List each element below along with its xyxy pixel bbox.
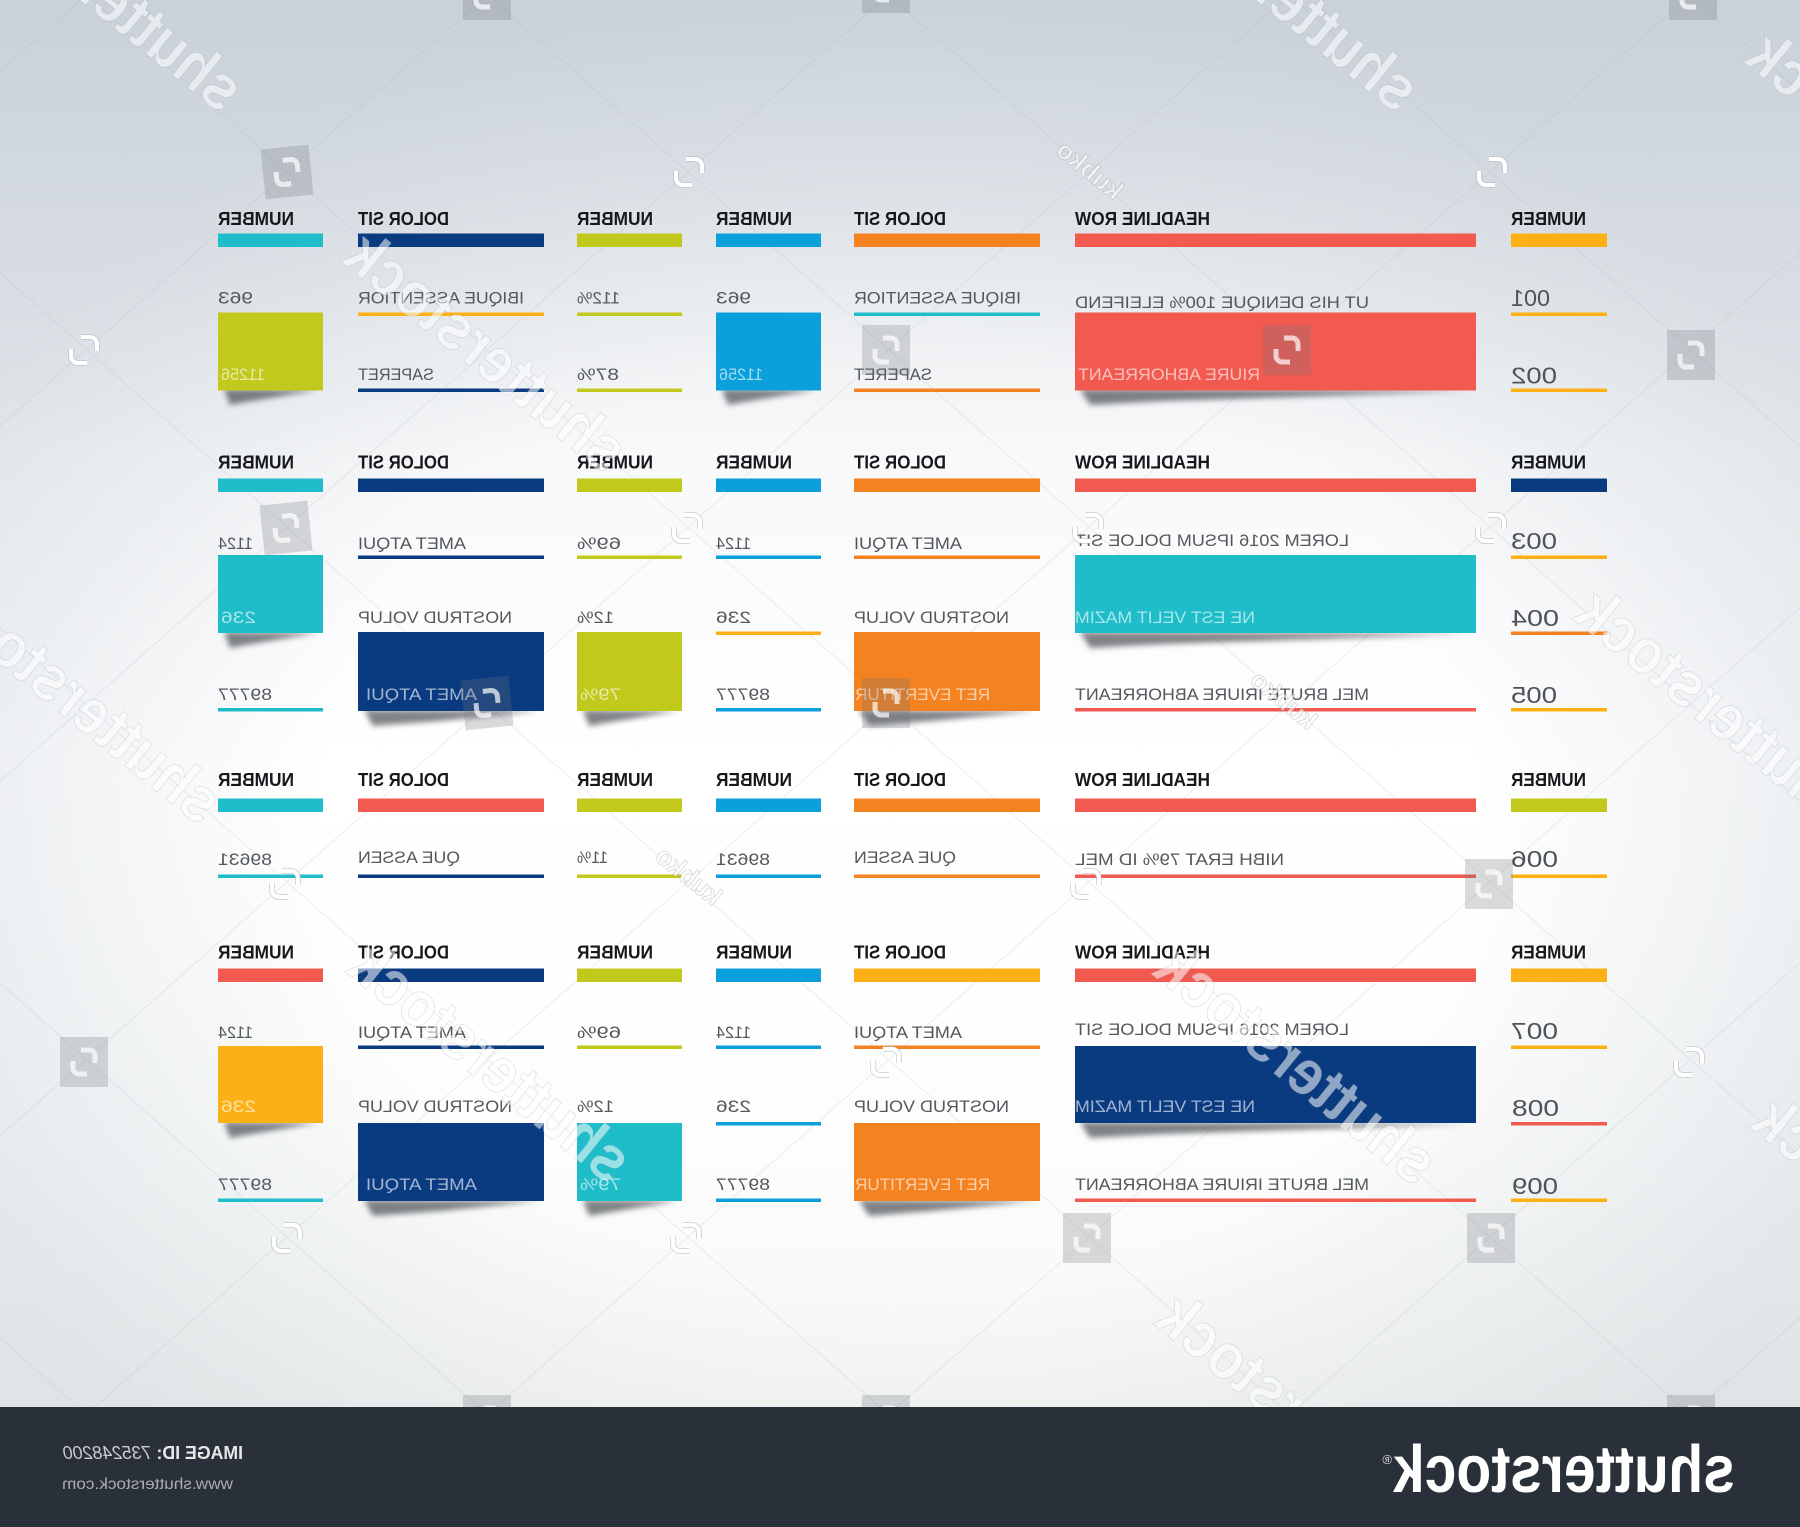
- heading: NUMBER: [1511, 209, 1586, 229]
- underline: [854, 556, 1040, 559]
- table 4: [218, 942, 1607, 1216]
- block label: AMET ATQUI: [366, 1175, 477, 1194]
- header bar: [218, 478, 323, 492]
- value: 89777: [218, 1175, 272, 1194]
- highlighted block: [854, 632, 1040, 711]
- block value: 79%: [580, 1175, 621, 1194]
- heading: NUMBER: [577, 209, 653, 229]
- column 5: [854, 452, 1040, 711]
- highlighted block: [358, 1123, 544, 1201]
- underline: [577, 556, 682, 559]
- underline: [854, 312, 1040, 316]
- heading: HEADLINE ROW: [1075, 452, 1210, 472]
- value: 11%: [577, 848, 608, 867]
- table 2: [218, 452, 1607, 726]
- label: NIBH ERAT 79% ID MEL: [1075, 850, 1284, 869]
- highlighted block: [577, 632, 682, 711]
- column 7: [1511, 209, 1607, 392]
- heading: DOLOR SIT: [854, 452, 946, 472]
- column 2: [358, 942, 544, 1201]
- header bar: [1511, 968, 1607, 982]
- value: 89777: [716, 685, 770, 704]
- label: NOSTRUD VOLUP: [854, 1097, 1009, 1116]
- underline: [1511, 556, 1607, 559]
- heading: NUMBER: [577, 452, 653, 472]
- heading: DOLOR SIT: [358, 770, 449, 790]
- watermark text: kubko: [650, 840, 728, 912]
- value: 1124: [716, 1023, 751, 1042]
- underline: [716, 1122, 821, 1126]
- block value: 11256: [221, 365, 265, 384]
- label: AMET ATQUI: [358, 1023, 466, 1042]
- footer: logo: shutterstock: [1392, 1432, 1735, 1507]
- column 3: [577, 452, 682, 711]
- footer: registered mark: ®: [1382, 1452, 1392, 1467]
- column 3: [577, 209, 682, 392]
- underline: [358, 312, 544, 316]
- highlighted block: [218, 555, 323, 633]
- underline: [1511, 312, 1607, 316]
- row number: 009: [1512, 1173, 1558, 1199]
- underline: [716, 1046, 821, 1049]
- label: SAPERET: [854, 365, 932, 384]
- label: QUE ASSEN: [854, 848, 956, 867]
- heading: NUMBER: [716, 770, 792, 790]
- header bar: [1075, 478, 1476, 492]
- underline: [716, 556, 821, 559]
- value: 12%: [577, 608, 614, 627]
- column 2: [358, 452, 544, 711]
- shadow: table 1 blocks: [224, 389, 1470, 405]
- heading: HEADLINE ROW: [1075, 770, 1210, 790]
- header bar: [716, 968, 821, 982]
- value: 89777: [716, 1175, 770, 1194]
- watermark text: shutterstock: [336, 926, 646, 1197]
- column 4: [716, 770, 821, 878]
- value: 236: [716, 1097, 751, 1116]
- block label: NE EST VELIT MAZIM: [1075, 608, 1255, 627]
- block value: 236: [221, 1097, 256, 1116]
- value: 112%: [577, 289, 620, 308]
- highlighted block: [1075, 312, 1476, 390]
- value: 89777: [218, 685, 272, 704]
- table 1: [218, 209, 1607, 405]
- underline: [577, 874, 682, 878]
- heading: NUMBER: [218, 452, 294, 472]
- block label: AMET ATQUI: [366, 685, 477, 704]
- column 5: [854, 209, 1040, 392]
- footer: image id: IMAGE ID: 735248200: [63, 1443, 243, 1463]
- underline: [1075, 874, 1476, 878]
- block value: 11256: [719, 365, 763, 384]
- label: AMET ATQUI: [854, 1023, 962, 1042]
- heading: HEADLINE ROW: [1075, 209, 1210, 229]
- header bar: [1511, 478, 1607, 492]
- heading: NUMBER: [716, 209, 792, 229]
- column 4: [716, 209, 821, 390]
- underline: [358, 874, 544, 878]
- header bar: [1075, 968, 1476, 982]
- header bar: [854, 234, 1040, 247]
- underline: [1511, 388, 1607, 392]
- column 7: [1511, 452, 1607, 712]
- header bar: [218, 968, 323, 982]
- underline: [1511, 1198, 1607, 1202]
- header bar: [358, 234, 544, 247]
- heading: NUMBER: [716, 942, 792, 962]
- highlighted block: [1075, 555, 1476, 633]
- block label: NE EST VELIT MAZIM: [1075, 1097, 1255, 1116]
- label: QUE ASSEN: [358, 848, 460, 867]
- watermark text: kubko: [1051, 134, 1129, 206]
- column 7: [1511, 942, 1607, 1202]
- column 1: [218, 770, 323, 878]
- row number: 007: [1511, 1018, 1558, 1044]
- label: SAPERET: [358, 365, 434, 384]
- header bar: [716, 234, 821, 247]
- column 1: [218, 942, 323, 1202]
- watermark text: shutterstock: [332, 216, 642, 487]
- header bar: [358, 478, 544, 492]
- heading: NUMBER: [218, 942, 294, 962]
- label: IBIQUE ASSENTIOR: [854, 289, 1021, 308]
- table 3: [218, 770, 1607, 878]
- heading: HEADLINE ROW: [1075, 942, 1210, 962]
- label: NOSTRUD VOLUP: [854, 608, 1009, 627]
- column 5: [854, 770, 1040, 878]
- heading: NUMBER: [577, 770, 653, 790]
- underline: [1511, 708, 1607, 712]
- footer: website: www.shutterstock.com: [62, 1476, 234, 1493]
- underline: [854, 1046, 1040, 1049]
- column 7: [1511, 770, 1607, 878]
- underline: [1511, 874, 1607, 878]
- column 6: [1075, 209, 1476, 390]
- column 6: [1075, 452, 1476, 712]
- shadow: table 2 blocks: [224, 632, 1470, 726]
- underline: [358, 388, 544, 392]
- value: 89631: [218, 850, 272, 869]
- value: 236: [716, 608, 751, 627]
- column 5: [854, 942, 1040, 1201]
- header bar: [854, 478, 1040, 492]
- column 1: [218, 452, 323, 712]
- header bar: [218, 798, 323, 812]
- heading: DOLOR SIT: [358, 209, 449, 229]
- value: 1124: [716, 534, 751, 553]
- label: LOREM 2016 IPSUM DOLOE SIT: [1075, 1020, 1349, 1039]
- underline: [1075, 1198, 1476, 1202]
- underline: [1511, 1122, 1607, 1126]
- header bar: [1511, 798, 1607, 812]
- heading: NUMBER: [218, 770, 294, 790]
- highlighted block: [577, 1123, 682, 1201]
- label: AMET ATQUI: [358, 534, 466, 553]
- label: UT HIS DENIQUE 100% ELEIFEND: [1075, 293, 1369, 312]
- header bar: [1075, 234, 1476, 247]
- value: 1124: [218, 534, 253, 553]
- highlighted block: [358, 632, 544, 711]
- heading: NUMBER: [577, 942, 653, 962]
- label: NOSTRUD VOLUP: [358, 608, 512, 627]
- label: LOREM 2016 IPSUM DOLOE SIT: [1075, 531, 1349, 550]
- header bar: [358, 798, 544, 812]
- column 2: [358, 209, 544, 392]
- column 4: [716, 942, 821, 1202]
- underline: [577, 388, 682, 392]
- highlighted block: [716, 312, 821, 390]
- heading: DOLOR SIT: [854, 942, 946, 962]
- column 1: [218, 209, 323, 390]
- heading: DOLOR SIT: [854, 209, 946, 229]
- header bar: [716, 478, 821, 492]
- row number: 003: [1511, 528, 1557, 554]
- column 3: [577, 770, 682, 878]
- row number: 004: [1511, 605, 1559, 631]
- header bar: [1511, 234, 1607, 247]
- value: 69%: [577, 534, 621, 553]
- heading: NUMBER: [716, 452, 792, 472]
- heading: DOLOR SIT: [358, 452, 449, 472]
- underline: [1511, 1046, 1607, 1049]
- column 4: [716, 452, 821, 712]
- header bar: [358, 968, 544, 982]
- label: AMET ATQUI: [854, 534, 962, 553]
- row number: 006: [1511, 846, 1558, 872]
- header bar: [577, 234, 682, 247]
- value: 87%: [577, 365, 619, 384]
- label: MEL BRUTE IRIURE ABHORREANT: [1075, 685, 1369, 704]
- column 2: [358, 770, 544, 878]
- highlighted block: [218, 1046, 323, 1123]
- header bar: [577, 798, 682, 812]
- label: IBIQUE ASSENTIOR: [358, 289, 524, 308]
- header bar: [577, 478, 682, 492]
- value: 963: [716, 289, 751, 308]
- heading: NUMBER: [1511, 942, 1586, 962]
- underline: [716, 708, 821, 712]
- header bar: [854, 798, 1040, 812]
- underline: [577, 1046, 682, 1049]
- label: NOSTRUD VOLUP: [358, 1097, 512, 1116]
- value: 1124: [218, 1023, 253, 1042]
- highlighted block: [218, 312, 323, 390]
- block value: 236: [221, 608, 256, 627]
- heading: NUMBER: [218, 209, 294, 229]
- row number: 005: [1511, 682, 1557, 708]
- footer bar: [0, 1407, 1800, 1527]
- underline: [577, 312, 682, 316]
- header bar: [854, 968, 1040, 982]
- label: MEL BRUTE IRIURE ABHORREANT: [1075, 1175, 1369, 1194]
- underline: [854, 874, 1040, 878]
- underline: [218, 874, 323, 878]
- watermark text: shutterstock: [1142, 928, 1452, 1199]
- underline: [358, 1046, 544, 1049]
- underline: [716, 632, 821, 635]
- underline: [1075, 708, 1476, 712]
- value: 89631: [716, 850, 770, 869]
- header bar: [577, 968, 682, 982]
- column 6: [1075, 942, 1476, 1202]
- row number: 008: [1512, 1095, 1559, 1121]
- block label: RET EVERTITUR: [855, 1175, 990, 1194]
- underline: [716, 874, 821, 878]
- heading: DOLOR SIT: [854, 770, 946, 790]
- value: 12%: [577, 1097, 614, 1116]
- heading: NUMBER: [1511, 770, 1586, 790]
- underline: [358, 556, 544, 559]
- underline: [716, 1198, 821, 1202]
- underline: [1511, 632, 1607, 635]
- highlighted block: [854, 1123, 1040, 1201]
- shadow: table 4 blocks: [224, 1122, 1470, 1216]
- header bar: [218, 234, 323, 247]
- underline: [218, 1198, 323, 1202]
- heading: DOLOR SIT: [358, 942, 449, 962]
- block value: 79%: [580, 685, 621, 704]
- heading: NUMBER: [1511, 452, 1586, 472]
- block label: RET EVERTITUR: [855, 685, 990, 704]
- watermark text: kubko: [1245, 664, 1323, 736]
- column 3: [577, 942, 682, 1201]
- row number: 002: [1511, 362, 1557, 388]
- value: 69%: [577, 1023, 621, 1042]
- highlighted block: [1075, 1046, 1476, 1123]
- underline: [218, 708, 323, 712]
- underline: [854, 388, 1040, 392]
- row number: 001: [1511, 285, 1550, 311]
- value: 963: [218, 289, 253, 308]
- header bar: [716, 798, 821, 812]
- column 6: [1075, 770, 1476, 878]
- header bar: [1075, 798, 1476, 812]
- block label: RIURE ABHORREANT: [1078, 365, 1260, 384]
